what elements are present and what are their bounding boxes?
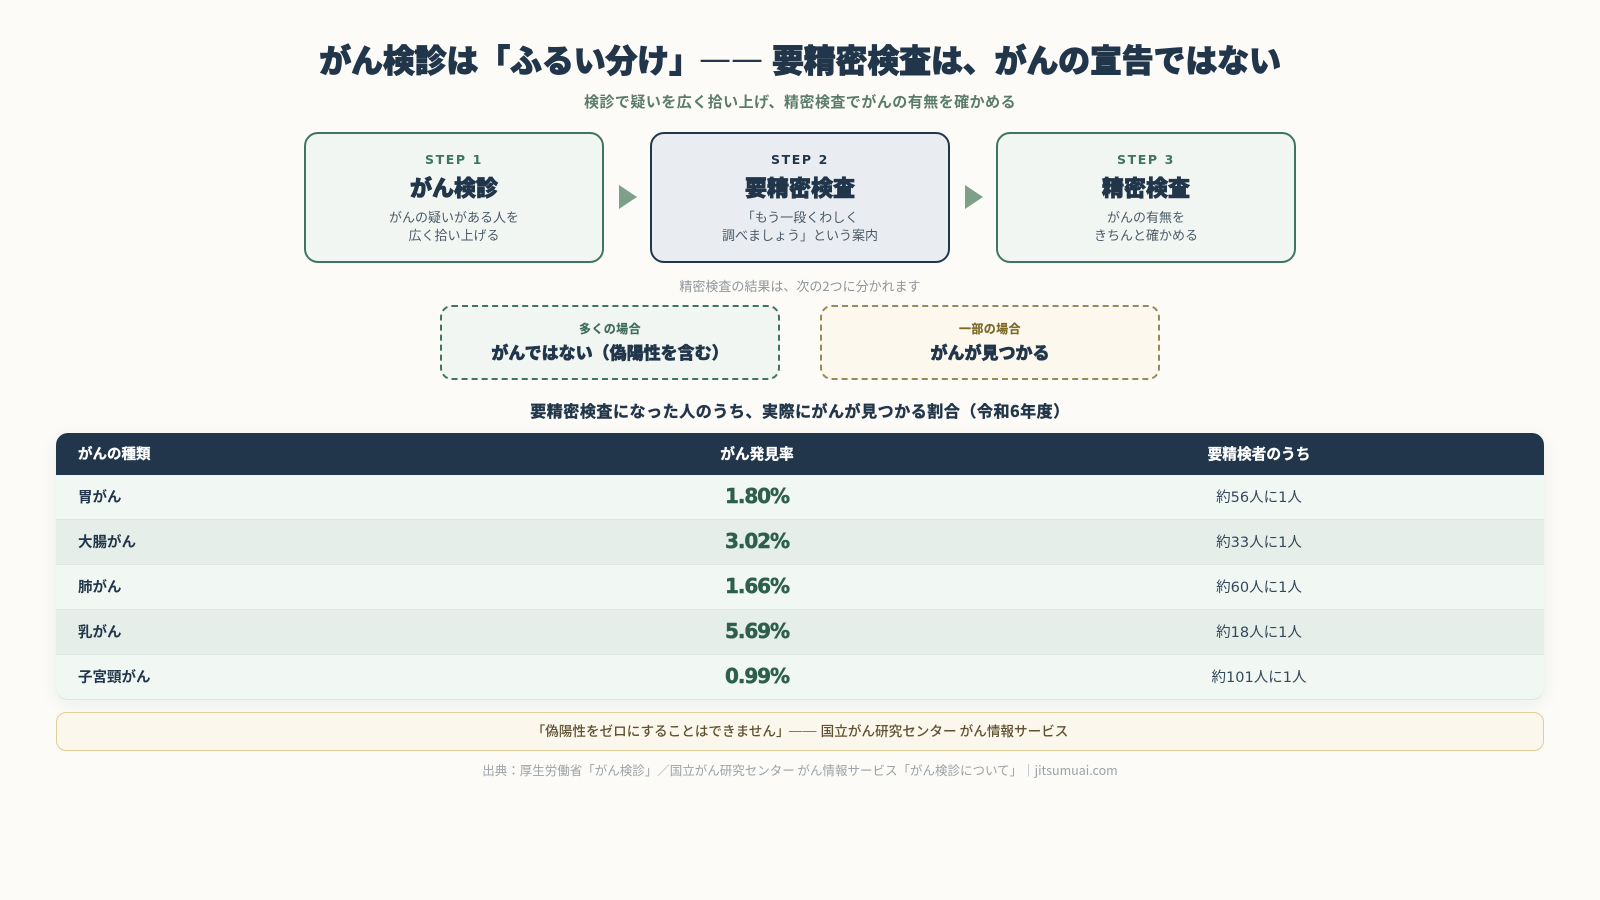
row: stomach: 胃がん	[78, 486, 122, 506]
row: colorectal	[56, 520, 1544, 565]
step 3 name: 精密検査	[1102, 171, 1190, 203]
result label: 一部の場合	[959, 320, 1021, 337]
table header: がん発見率	[720, 442, 794, 464]
result text: がんではない（偽陽性を含む）	[491, 339, 729, 364]
row: cervical	[56, 655, 1544, 700]
row: colorectal: 約33人に1人	[1216, 534, 1302, 550]
step 2 label: STEP 2	[771, 152, 829, 167]
step 2 description: 調べましょう」という案内	[722, 225, 878, 244]
source: 出典：厚生労働省「がん検診」／国立がん研究センター がん情報サービス「がん検診について」｜jitsumuai.com	[482, 760, 1118, 779]
table header: 要精検者のうち	[1208, 442, 1310, 464]
panel: step 1	[304, 132, 604, 263]
callout: quote: —	[802, 716, 817, 741]
panel: result minority	[820, 305, 1160, 380]
table: detection rates	[56, 433, 1544, 700]
step 3 description: がんの有無を	[1107, 207, 1185, 226]
step 2 name: 要精密検査	[745, 171, 855, 203]
step 1 description: がんの疑いがある人を	[389, 207, 519, 226]
row: cervical: 0.99%	[725, 664, 789, 688]
callout: quote	[56, 712, 1544, 751]
result text: がんが見つかる	[930, 339, 1050, 364]
row: breast: 5.69%	[725, 619, 789, 643]
row: cervical: 約101人に1人	[1212, 670, 1306, 686]
subtitle: 検診で疑いを広く拾い上げ、精密検査でがんの有無を確かめる	[584, 91, 1016, 112]
row: cervical: 子宮頸がん	[78, 666, 150, 686]
panel: step 3	[996, 132, 1296, 263]
row: lung: 1.66%	[725, 574, 789, 598]
table header	[56, 433, 1544, 475]
row: breast: 乳がん	[78, 620, 122, 642]
branch caption: 精密検査の結果は、次の2つに分かれます	[679, 276, 921, 295]
step 1 label: STEP 1	[425, 152, 483, 167]
arrow: step 2 to step 3	[965, 185, 983, 209]
callout: quote: 「偽陽性をゼロにすることはできません」 国立がん研究センター がん情報サービス	[532, 720, 1068, 740]
step 1 description: 広く拾い上げる	[408, 225, 500, 244]
panel: step 2	[650, 132, 950, 263]
step 2 description: 「もう一段くわしく	[742, 207, 858, 226]
step 3 description	[1094, 207, 1198, 244]
row: breast: 約18人に1人	[1216, 624, 1302, 640]
step 2 description	[722, 207, 878, 244]
row: lung: 約60人に1人	[1216, 580, 1302, 596]
row: lung: 肺がん	[78, 576, 122, 596]
table header: がんの種類	[78, 442, 150, 464]
title: —	[699, 30, 731, 82]
callout: quote: —	[788, 716, 803, 741]
title: がん検診は「ふるい分け」 要精密検査は、がんの宣告ではない	[319, 36, 1281, 82]
step 3 description: きちんと確かめる	[1094, 225, 1198, 244]
table heading: 要精密検査になった人のうち、実際にがんが見つかる割合（令和6年度）	[530, 398, 1070, 422]
row: lung	[56, 565, 1544, 610]
step 1 description	[389, 207, 519, 244]
result label: 多くの場合	[579, 320, 641, 337]
step 3 label: STEP 3	[1117, 152, 1175, 167]
row: stomach	[56, 475, 1544, 520]
row: stomach: 1.80%	[725, 484, 789, 508]
row: breast	[56, 610, 1544, 655]
title: —	[731, 30, 763, 82]
row: colorectal: 大腸がん	[78, 530, 136, 552]
row: colorectal: 3.02%	[725, 529, 789, 553]
step 1 name: がん検診	[410, 171, 498, 203]
panel: result majority	[440, 305, 780, 380]
row: stomach: 約56人に1人	[1216, 490, 1302, 506]
arrow: step 1 to step 2	[619, 185, 637, 209]
